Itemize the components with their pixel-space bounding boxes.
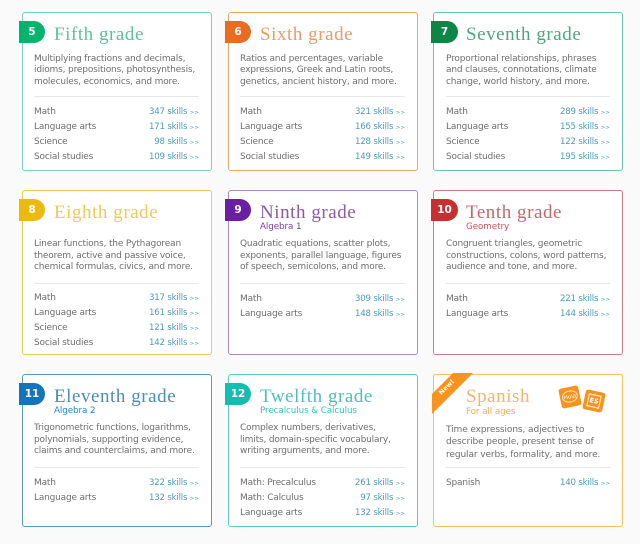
description: chemical formulas, civics, and more.: [34, 262, 193, 272]
description: Multiplying fractions and decimals,: [34, 54, 185, 64]
panel: Spanish: [433, 374, 623, 527]
badge: 10: 10: [437, 204, 452, 216]
row: Language arts: [34, 122, 199, 132]
row: Language arts: 166 skills >>: [355, 122, 405, 132]
row: Spanish: 140 skills >>: [560, 478, 610, 488]
description: of speech, semicolons, and more.: [240, 262, 386, 272]
badge: 8: [19, 199, 45, 221]
row: Language arts: 155 skills >>: [560, 122, 610, 132]
description: change, world history, and more.: [446, 77, 590, 87]
heading: Seventh grade: Seventh grade: [466, 24, 581, 45]
row: Math: [34, 107, 199, 117]
row: Social studies: 149 skills >>: [355, 152, 405, 162]
row: Math: 322 skills >>: [149, 478, 199, 488]
row: Language arts: [34, 493, 199, 503]
description: Quadratic equations, scatter plots,: [240, 239, 390, 249]
description: Time expressions, adjectives to: [446, 425, 584, 435]
row: Spanish: Spanish: [446, 478, 480, 488]
row: Social studies: Social studies: [446, 152, 505, 162]
row: Math: [446, 294, 610, 304]
heading: Sixth grade: Sixth grade: [260, 24, 353, 45]
description: [240, 239, 401, 272]
row: Language arts: 132 skills >>: [355, 508, 405, 518]
heading: Tenth grade: Tenth grade: [466, 202, 562, 223]
row: Language arts: [446, 309, 610, 319]
row: Language arts: [240, 122, 405, 132]
description: Ratios and percentages, variable: [240, 54, 383, 64]
row: Math: Math: [240, 294, 262, 304]
row: Language arts: 144 skills >>: [560, 309, 610, 319]
subheading: Geometry: Geometry: [466, 222, 509, 232]
heading: Eleventh grade: Eleventh grade: [54, 386, 176, 407]
row: Math: 347 skills >>: [149, 107, 199, 117]
badge: 5: 5: [28, 26, 36, 38]
description: [446, 239, 606, 272]
description: idioms, prepositions, photosynthesis,: [34, 65, 195, 75]
description: polynomials, supporting evidence,: [34, 435, 183, 445]
row: Language arts: [34, 308, 199, 318]
heading: Ninth grade: Ninth grade: [260, 202, 356, 223]
ribbon: New!: [432, 373, 473, 414]
row: Math: Math: [34, 107, 56, 117]
row: Language arts: Language arts: [446, 309, 508, 319]
row: Science: 128 skills >>: [355, 137, 405, 147]
description: [34, 54, 195, 87]
row: Math: 309 skills >>: [355, 294, 405, 304]
row: Science: Science: [240, 137, 274, 147]
row: Language arts: Language arts: [34, 308, 96, 318]
description: molecules, economics, and more.: [34, 77, 180, 87]
row: Social studies: [446, 152, 610, 162]
row: Science: Science: [34, 323, 68, 333]
row: Science: [446, 137, 610, 147]
row: Math: [34, 478, 199, 488]
row: Math: Precalculus: 261 skills >>: [355, 478, 405, 488]
badge: 7: 7: [441, 26, 448, 38]
row: Math: Calculus: 97 skills >>: [360, 493, 405, 503]
row: Social studies: [34, 152, 199, 162]
heading: Fifth grade: Fifth grade: [54, 24, 144, 45]
badge: 6: 6: [234, 26, 242, 38]
badge: 9: 9: [234, 204, 242, 216]
description: exponents, parallel language, figures: [240, 251, 401, 261]
description: audience and tone, and more.: [446, 262, 577, 272]
description: Linear functions, the Pythagorean: [34, 239, 181, 249]
row: Language arts: [446, 122, 610, 132]
row: Math: Precalculus: [240, 478, 405, 488]
description: Congruent triangles, geometric: [446, 239, 582, 249]
description: describe people, present tense of: [446, 437, 594, 447]
row: Language arts: Language arts: [240, 508, 302, 518]
row: Language arts: 161 skills >>: [149, 308, 199, 318]
description: [34, 423, 195, 456]
row: Math: Calculus: Math: Calculus: [240, 493, 303, 503]
description: Proportional relationships, phrases: [446, 54, 596, 64]
row: Math: Math: [446, 294, 468, 304]
row: Language arts: Language arts: [240, 122, 302, 132]
row: Science: [240, 137, 405, 147]
row: Social studies: [34, 338, 199, 348]
heading: Spanish: Spanish: [466, 386, 530, 407]
ribbon: New!: New!: [437, 378, 456, 397]
description: regular verbs, formality, and more.: [446, 450, 600, 460]
row: Math: Calculus: [240, 493, 405, 503]
row: Math: Precalculus: Math: Precalculus: [240, 478, 316, 488]
icon: Hola and ES cards: ES: [589, 396, 600, 406]
row: Math: Math: [446, 107, 468, 117]
row: Science: 121 skills >>: [149, 323, 199, 333]
badge: 12: [225, 383, 251, 405]
row: Social studies: [240, 152, 405, 162]
description: [446, 54, 597, 87]
badge: 7: [431, 21, 458, 43]
row: Science: Science: [446, 137, 480, 147]
row: Social studies: 109 skills >>: [149, 152, 199, 162]
row: Math: 317 skills >>: [149, 293, 199, 303]
row: Math: Math: [240, 107, 262, 117]
panel: Sixth grade: [228, 12, 418, 171]
heading: Twelfth grade: Twelfth grade: [260, 386, 373, 407]
description: [34, 239, 193, 272]
row: Language arts: Language arts: [34, 493, 96, 503]
row: Science: 98 skills >>: [154, 137, 199, 147]
row: Social studies: 142 skills >>: [149, 338, 199, 348]
row: Math: [240, 107, 405, 117]
row: Social studies: Social studies: [34, 152, 93, 162]
row: Language arts: 148 skills >>: [355, 309, 405, 319]
row: Math: [446, 107, 610, 117]
description: limits, domain-specific vocabulary,: [240, 435, 391, 445]
badge: 6: [225, 21, 251, 43]
panel: Tenth grade: [433, 190, 623, 355]
description: expressions, Greek and Latin roots,: [240, 65, 393, 75]
badge: 11: [19, 383, 45, 405]
description: claims and counterclaims, and more.: [34, 446, 195, 456]
panel: Eleventh grade: [22, 374, 212, 527]
row: Science: Science: [34, 137, 68, 147]
badge: 5: [19, 21, 45, 43]
panel: Fifth grade: [22, 12, 212, 171]
description: constructions, colons, word patterns,: [446, 251, 606, 261]
icon: Hola and ES cards: Hola: [563, 393, 577, 402]
row: Math: [34, 293, 199, 303]
row: Language arts: Language arts: [34, 122, 96, 132]
row: Math: Math: [34, 478, 56, 488]
row: Social studies: 195 skills >>: [560, 152, 610, 162]
icon: Hola and ES cards: [558, 386, 606, 412]
row: Language arts: Language arts: [446, 122, 508, 132]
description: Trigonometric functions, logarithms,: [34, 423, 191, 433]
description: [446, 425, 600, 460]
row: Language arts: [240, 309, 405, 319]
subheading: Algebra 2: Algebra 2: [54, 406, 96, 416]
subheading: For all ages: For all ages: [466, 407, 515, 417]
row: Spanish: [446, 478, 610, 488]
row: Math: 289 skills >>: [560, 107, 610, 117]
row: Social studies: Social studies: [34, 338, 93, 348]
heading: Eighth grade: Eighth grade: [54, 202, 158, 223]
description: theorem, active and passive voice,: [34, 251, 186, 261]
row: Science: 122 skills >>: [560, 137, 610, 147]
row: Science: [34, 137, 199, 147]
row: Language arts: Language arts: [240, 309, 302, 319]
row: Math: 221 skills >>: [560, 294, 610, 304]
row: Language arts: 171 skills >>: [149, 122, 199, 132]
row: Language arts: 132 skills >>: [149, 493, 199, 503]
row: Math: Math: [34, 293, 56, 303]
badge: 12: 12: [231, 388, 245, 400]
description: Complex numbers, derivatives,: [240, 423, 376, 433]
panel: Seventh grade: [433, 12, 623, 171]
badge: 10: [431, 199, 458, 221]
panel: Eighth grade: [22, 190, 212, 355]
badge: 9: [225, 199, 251, 221]
description: [240, 423, 391, 456]
row: Language arts: [240, 508, 405, 518]
panel: Twelfth grade: [228, 374, 418, 527]
panel: Ninth grade: [228, 190, 418, 355]
badge: 11: 11: [25, 388, 39, 400]
badge: 8: 8: [28, 204, 36, 216]
row: Social studies: Social studies: [240, 152, 299, 162]
row: Math: 321 skills >>: [355, 107, 405, 117]
subheading: Precalculus & Calculus: Precalculus & Calculus: [260, 406, 357, 416]
description: genetics, ancient history, and more.: [240, 77, 397, 87]
description: writing arguments, and more.: [240, 446, 370, 456]
subheading: Algebra 1: Algebra 1: [260, 222, 302, 232]
row: Math: [240, 294, 405, 304]
description: [240, 54, 397, 87]
description: and clauses, connotations, climate: [446, 65, 597, 75]
row: Science: [34, 323, 199, 333]
